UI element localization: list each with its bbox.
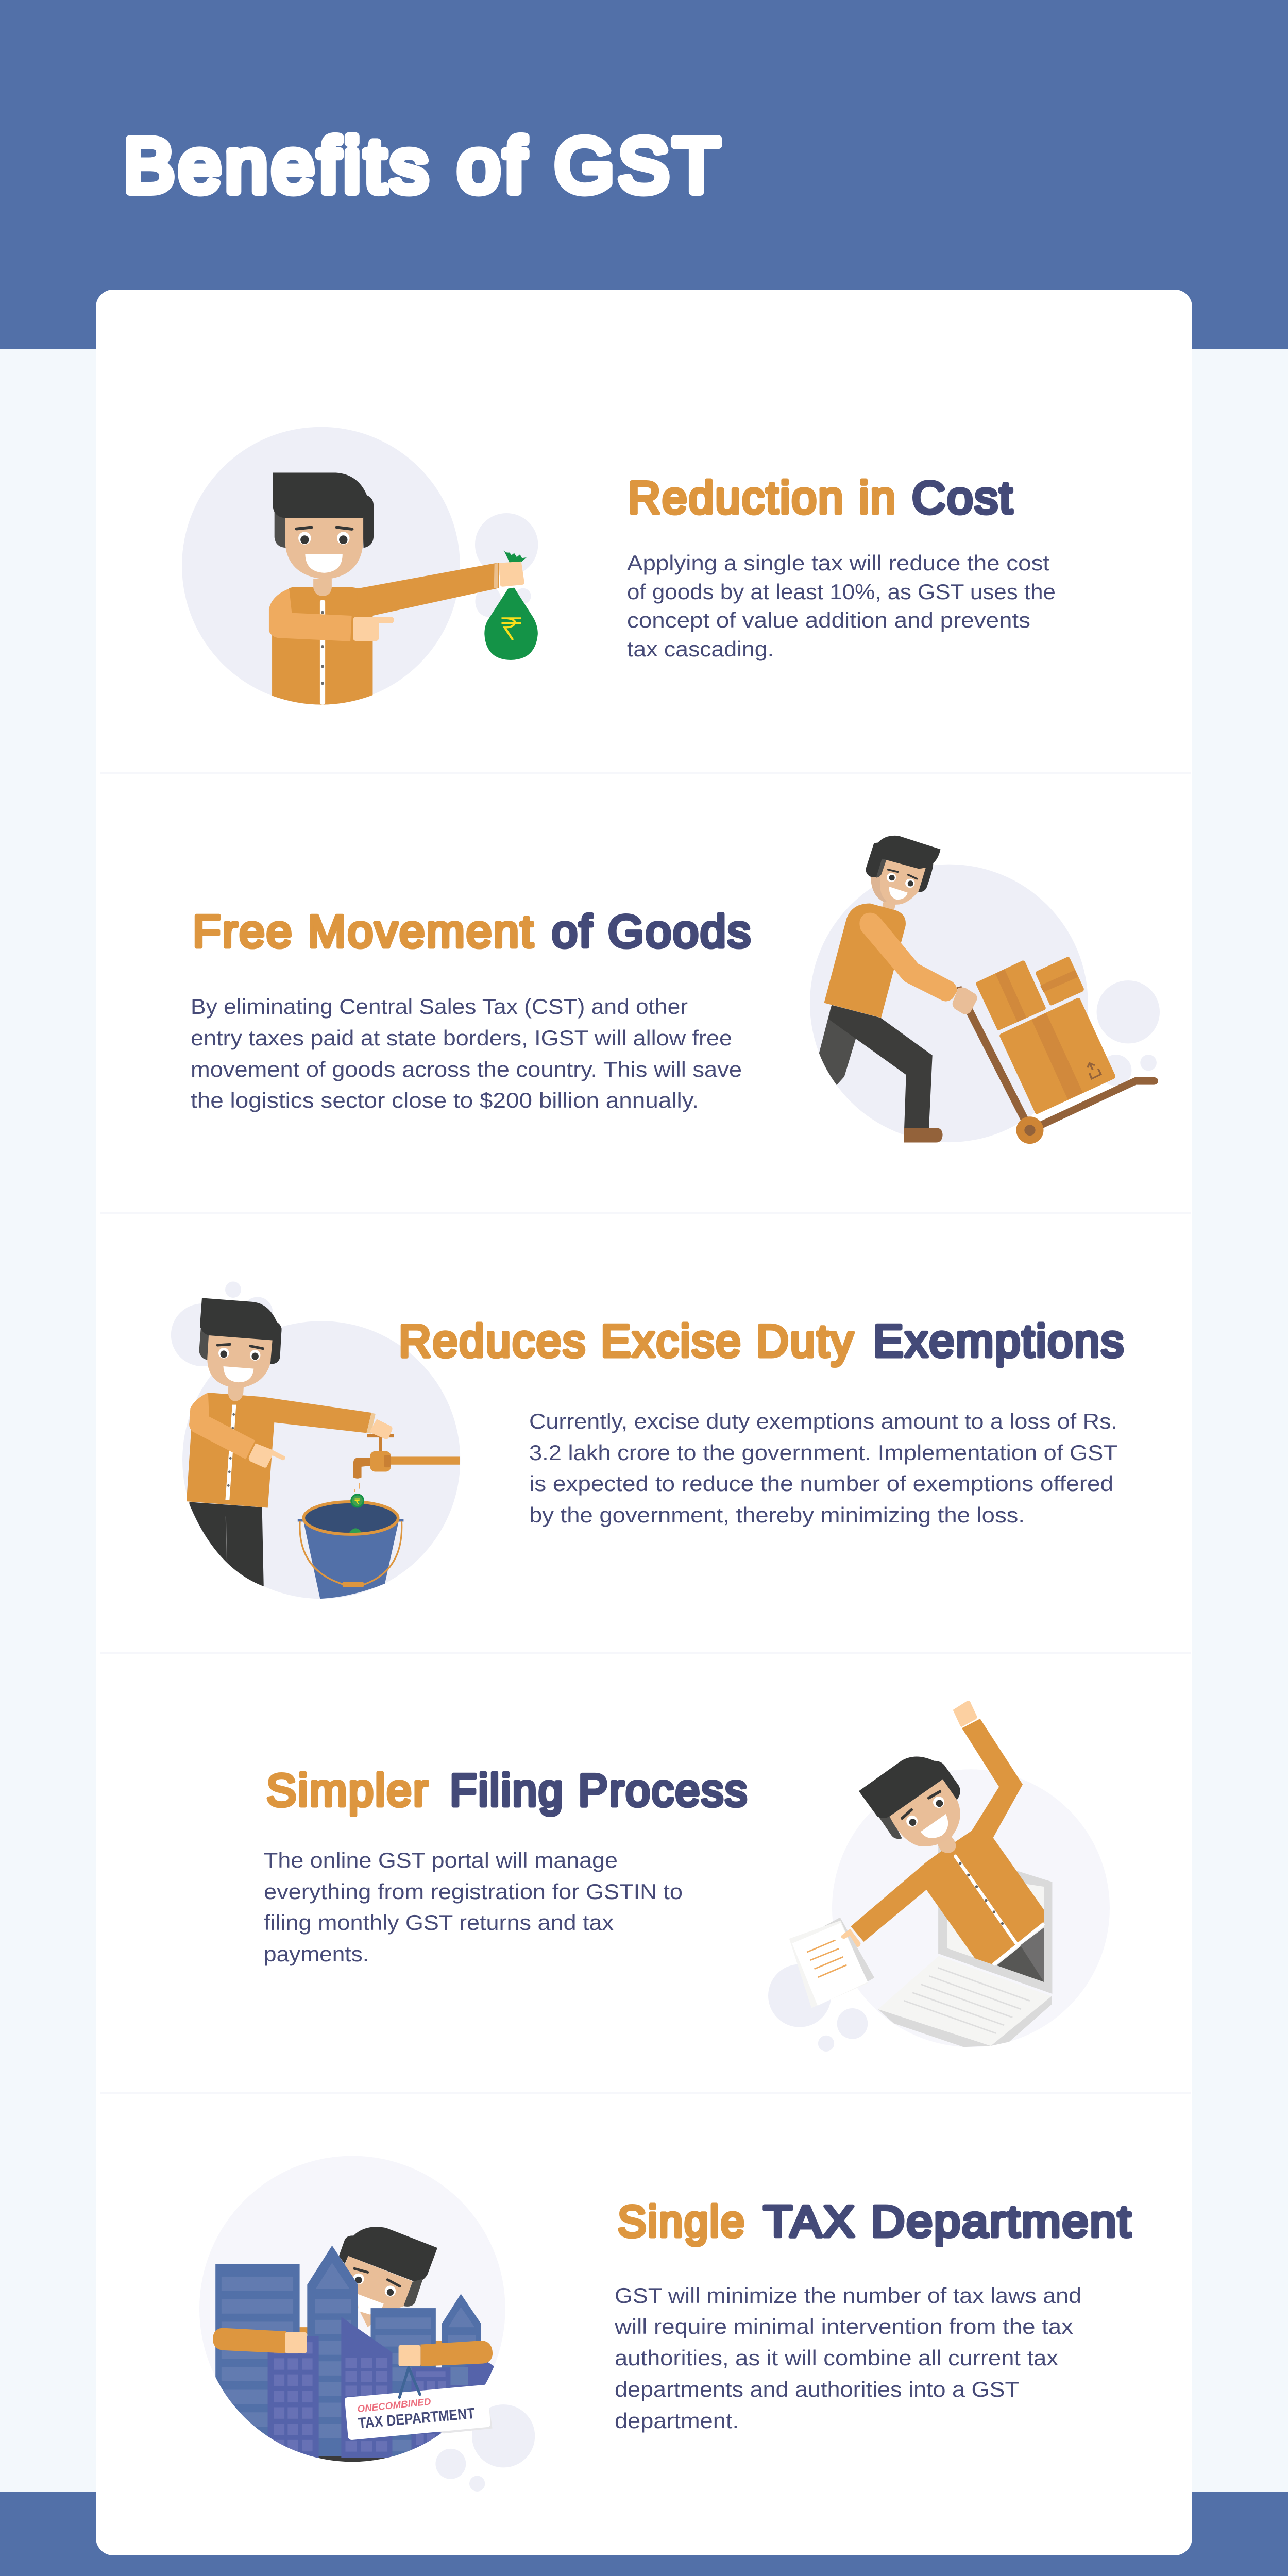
panel: free movement of goods [191,836,1160,1144]
header band [0,0,1288,349]
title: Benefits of GST [124,123,724,208]
illustration: man pushing cart of boxes [810,836,1160,1144]
body text: filing monthly GST returns and tax [264,1910,614,1935]
body text [627,551,1056,661]
heading: Cost [912,472,1014,523]
heading [193,906,752,957]
white card [96,290,1192,2555]
body text: everything from registration for GSTIN to [264,1879,683,1904]
body text: The online GST portal will manage [264,1848,618,1872]
illustration: man at tap with bucket [171,1281,460,1599]
heading: Free Movement [193,906,535,957]
heading: Reduction in [628,472,897,523]
heading: Reduces Excise Duty [399,1315,855,1366]
heading: of Goods [552,906,752,957]
body text: entry taxes paid at state borders, IGST will allow free [191,1026,732,1050]
body text: department. [615,2409,739,2433]
heading [618,2197,1132,2246]
body text [614,2283,1081,2433]
body text: tax cascading. [627,637,774,661]
panel: reduces excise duty exemptions [171,1281,1125,1599]
heading: Single [618,2197,746,2246]
body text: by the government, thereby minimizing the loss. [529,1503,1025,1527]
body text: is expected to reduce the number of exemptions offered [529,1471,1113,1496]
heading: Exemptions [873,1315,1125,1366]
panel: single tax department [191,2156,1132,2492]
illustration: man behind buildings with sign: ONECOMBINED [357,2396,431,2414]
footer band [0,2492,1288,2576]
body text: of goods by at least 10%, as GST uses the [627,580,1056,604]
body text [191,994,742,1112]
panel: reduction in cost [182,427,1056,705]
heading: TAX Department [764,2197,1132,2246]
body text [264,1848,683,1966]
heading [266,1765,749,1816]
body text: Currently, excise duty exemptions amount to a loss of Rs. [529,1409,1117,1433]
body text: 3.2 lakh crore to the government. Implementation of GST [529,1440,1117,1465]
body text: will require minimal intervention from the tax [614,2314,1073,2338]
illustration: man behind buildings with sign: TAX DEPARTMENT [358,2405,476,2432]
illustration: man behind buildings with sign [191,2156,535,2492]
illustration: man holding money bag [182,427,538,705]
heading: Simpler [266,1765,430,1816]
panel: simpler filing process [264,1701,1110,2052]
heading: Filing Process [450,1765,749,1816]
body text: authorities, as it will combine all current tax [615,2346,1058,2370]
illustration: man leaping from laptop [768,1701,1110,2052]
body text: Applying a single tax will reduce the cost [627,551,1049,575]
body text: the logistics sector close to $200 billion annually. [191,1088,699,1112]
body text: movement of goods across the country. This will save [191,1057,742,1081]
heading [399,1315,1125,1366]
body text: By eliminating Central Sales Tax (CST) and other [191,994,688,1019]
body text: payments. [264,1942,369,1966]
body text: departments and authorities into a GST [615,2377,1019,2401]
body text [529,1409,1117,1527]
body text: concept of value addition and prevents [627,608,1030,632]
body text: GST will minimize the number of tax laws and [615,2283,1081,2308]
